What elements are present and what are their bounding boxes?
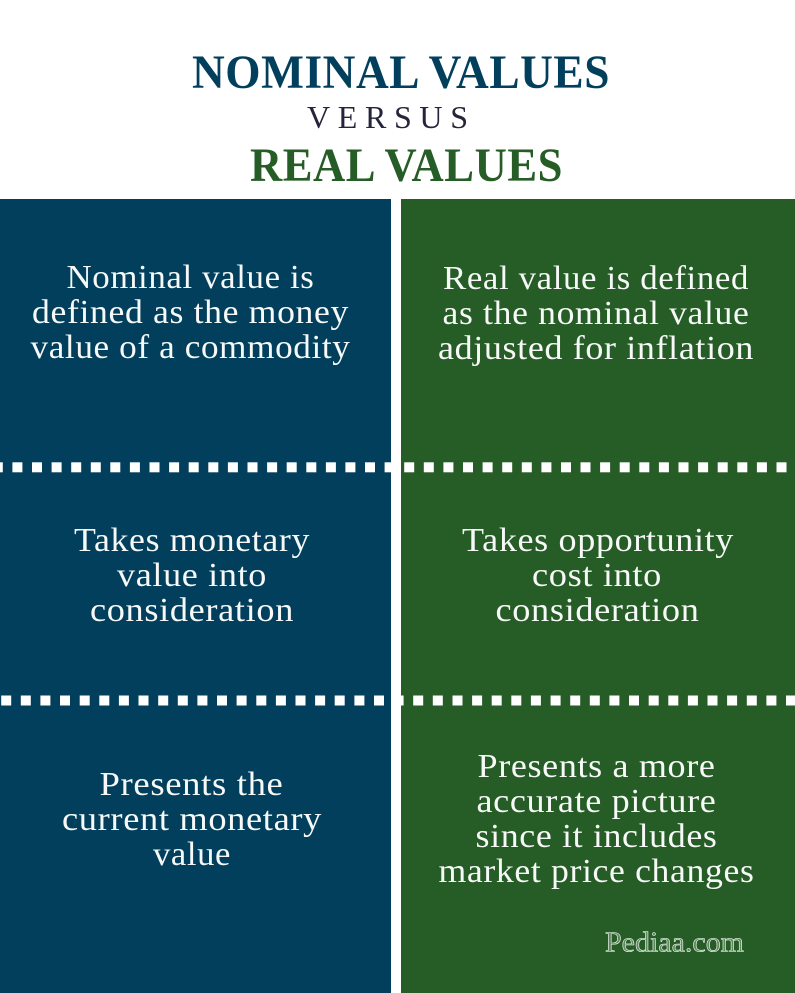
text: real definition bbox=[438, 260, 754, 367]
divider: first dotted row bbox=[0, 462, 787, 472]
divider: second dotted row bbox=[1, 696, 795, 706]
text: real accurate picture: market price changes bbox=[438, 853, 754, 890]
text: nominal definition: value of a commodity bbox=[30, 329, 350, 366]
text: nominal definition: Nominal value is bbox=[66, 259, 314, 296]
text: real definition: Real value is defined bbox=[443, 260, 749, 297]
text: real accurate picture: since it includes bbox=[476, 818, 718, 855]
text: real consideration: consideration bbox=[496, 592, 700, 629]
panel: nominal values column bbox=[0, 199, 391, 993]
text: real accurate picture bbox=[438, 748, 754, 890]
text: nominal consideration: Takes monetary bbox=[74, 522, 310, 559]
text: nominal current value: value bbox=[153, 836, 231, 873]
text: nominal consideration bbox=[74, 522, 310, 629]
text: real accurate picture: Presents a more bbox=[478, 748, 716, 785]
heading: real values: REAL VALUES bbox=[250, 139, 563, 192]
text: nominal current value: current monetary bbox=[62, 801, 322, 838]
text: nominal current value bbox=[62, 766, 322, 873]
text: real consideration: Takes opportunity bbox=[462, 522, 734, 559]
text: nominal consideration: consideration bbox=[90, 592, 294, 629]
text: nominal definition bbox=[30, 259, 350, 366]
text: real consideration bbox=[462, 522, 734, 629]
text: real accurate picture: accurate picture bbox=[476, 783, 716, 820]
panel: real values column bbox=[401, 199, 795, 993]
title bbox=[192, 46, 610, 192]
text: real definition: adjusted for inflation bbox=[438, 330, 754, 367]
text: real definition: as the nominal value bbox=[442, 295, 750, 332]
text: real consideration: cost into bbox=[532, 557, 662, 594]
logo: Pediaa.com: Pediaa.com bbox=[605, 926, 744, 958]
text: nominal current value: Presents the bbox=[100, 766, 284, 803]
heading: nominal values: NOMINAL VALUES bbox=[192, 46, 610, 99]
text: nominal definition: defined as the money bbox=[32, 294, 349, 331]
text: nominal consideration: value into bbox=[117, 557, 267, 594]
heading: versus: VERSUS bbox=[307, 99, 468, 135]
